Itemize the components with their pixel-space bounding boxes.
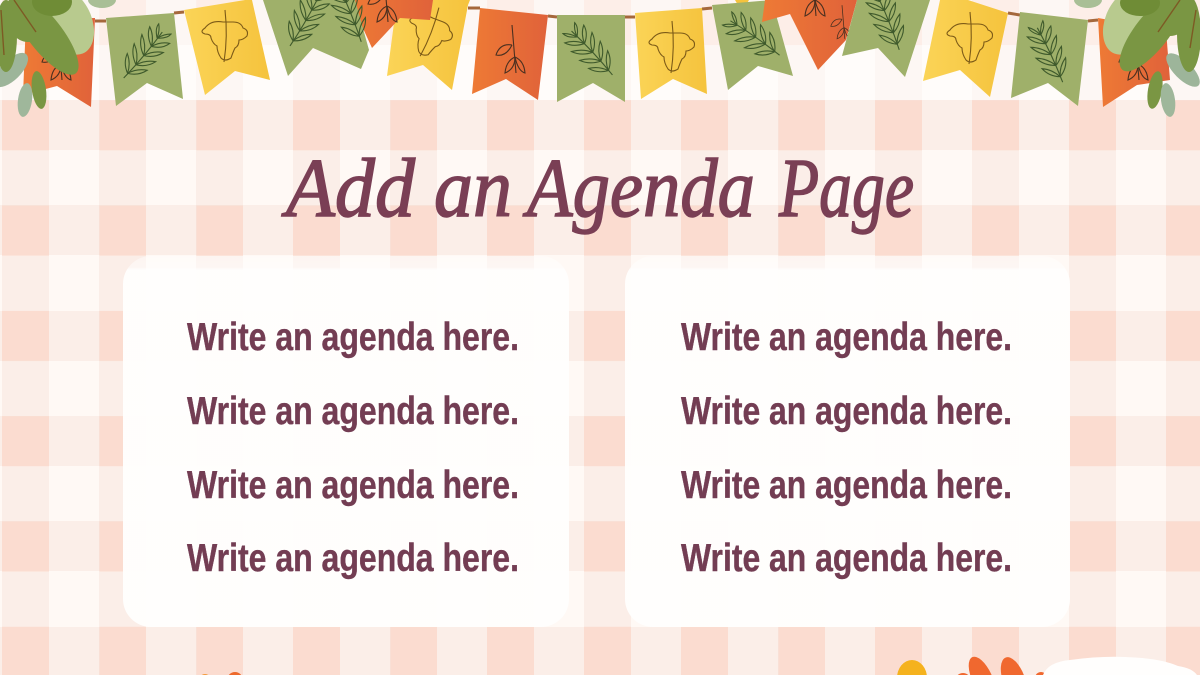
agenda line 1: Write an agenda here. xyxy=(681,316,1012,359)
flag: orange 4 xyxy=(762,0,857,70)
title: Agenda xyxy=(523,142,755,235)
flag: yellow with leaf 2 xyxy=(387,0,470,90)
bottom decoration: left flowers xyxy=(200,672,243,675)
panel: right agenda xyxy=(625,256,1070,627)
flag: orange 3 xyxy=(472,8,548,100)
flag: small yellow behind xyxy=(735,0,749,12)
bottom decoration: right flowers and cloud xyxy=(897,653,1197,675)
bunting string xyxy=(95,8,1098,21)
flag: orange 5 xyxy=(1098,18,1170,107)
agenda line 4: Write an agenda here. xyxy=(187,537,519,580)
flag: yellow 3 xyxy=(635,8,707,99)
flag: green with two ferns xyxy=(263,0,374,76)
foliage: top right xyxy=(1074,0,1200,118)
foliage: top left xyxy=(0,0,116,118)
bunting flags xyxy=(23,0,1170,107)
flag: orange far left xyxy=(23,18,95,107)
flag: green 4 xyxy=(712,0,793,90)
flag: yellow with leaf xyxy=(184,0,270,95)
flag: orange 2 xyxy=(350,0,433,48)
title: Add xyxy=(281,142,416,235)
agenda line 3: Write an agenda here. xyxy=(681,464,1012,507)
flag: green 6 xyxy=(1011,12,1088,106)
title: an xyxy=(434,142,512,235)
title: Page xyxy=(778,142,914,235)
agenda line 1: Write an agenda here. xyxy=(187,316,519,359)
agenda line 3: Write an agenda here. xyxy=(187,464,519,507)
agenda line 2: Write an agenda here. xyxy=(681,390,1012,433)
title xyxy=(281,142,914,235)
flag: green 3 xyxy=(557,15,625,102)
flag: yellow 4 xyxy=(923,0,1008,97)
agenda line 4: Write an agenda here. xyxy=(681,537,1012,580)
flag: green 5 xyxy=(842,0,930,77)
flag: green with fern xyxy=(106,13,183,106)
panel: left agenda xyxy=(123,256,569,627)
agenda line 2: Write an agenda here. xyxy=(187,390,519,433)
